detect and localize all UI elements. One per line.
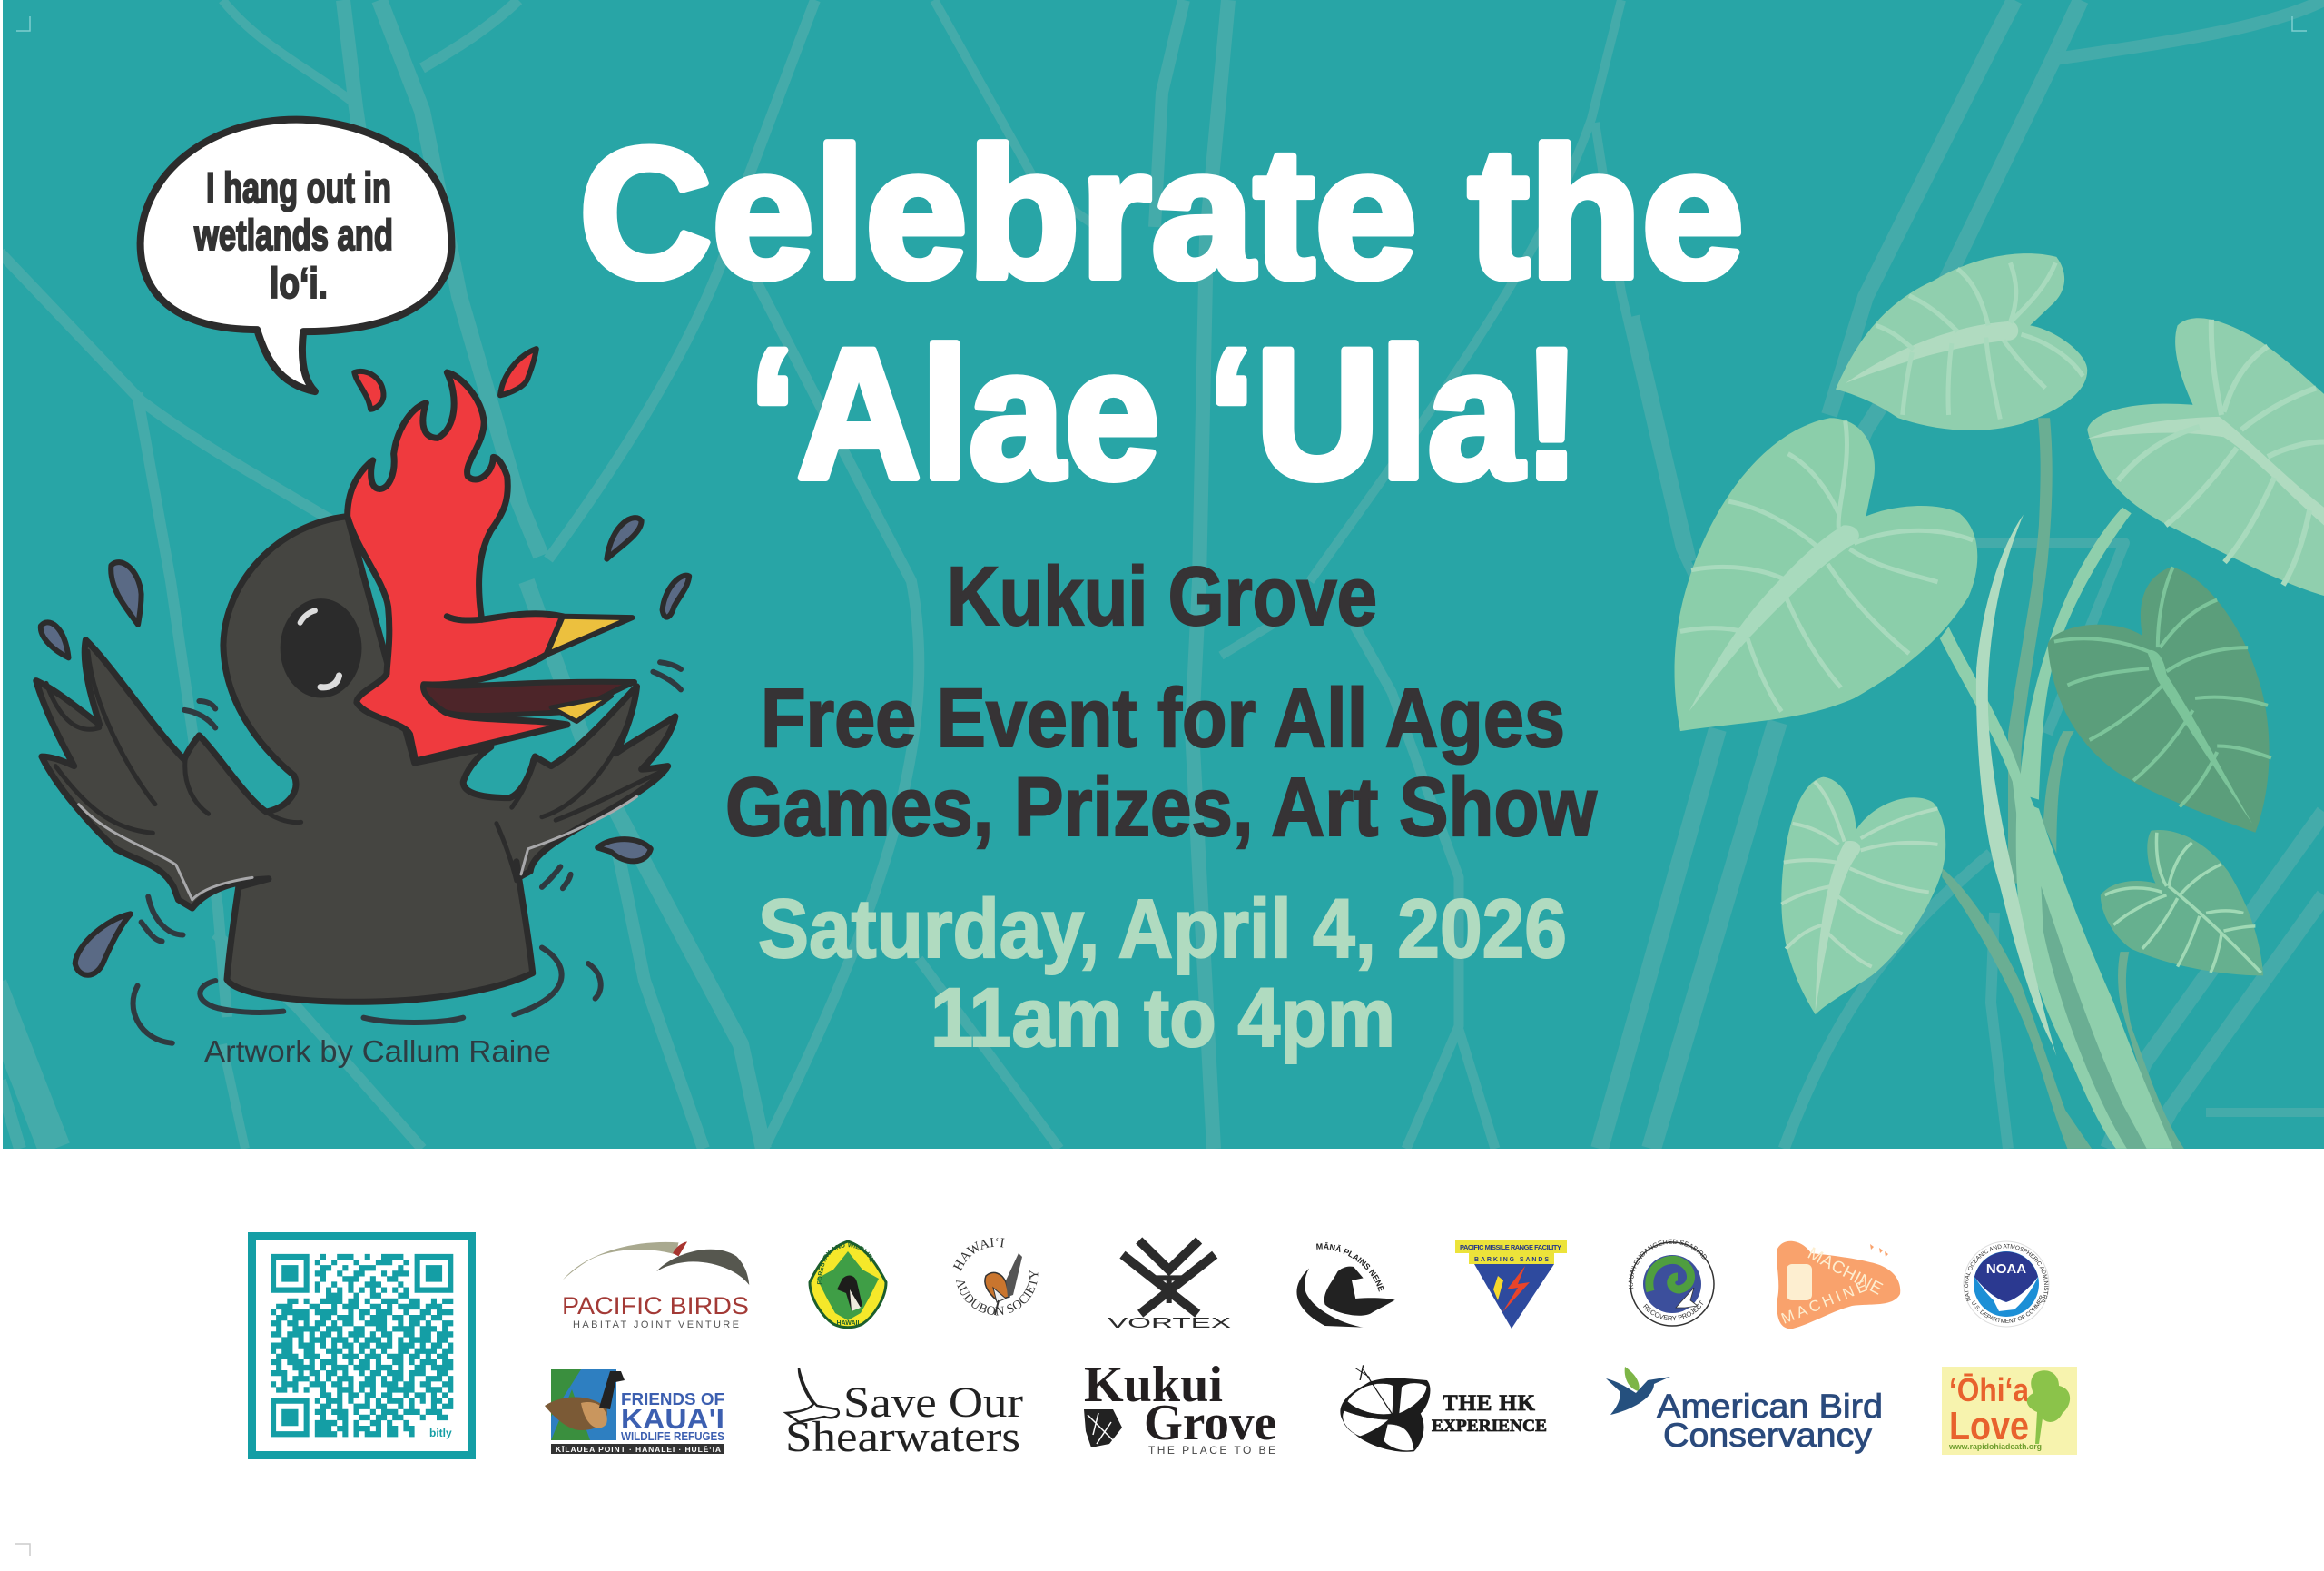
logo: NOAA: NATIONAL OCEANIC AND ATMOSPHERIC ADMINISTRATION — [1965, 1244, 2048, 1302]
logo: American Bird Conservancy: American Bird — [1657, 1388, 1883, 1425]
logo: Kukui Grove: Grove — [1144, 1395, 1276, 1451]
dark green leaf — [2048, 567, 2271, 833]
logo: Forestry and Wildlife Hawaii: FORESTRY AND WILDLIFE — [817, 1242, 874, 1284]
logo: Hawaii Audubon Society — [953, 1237, 1039, 1315]
logo: Machine Machine: MACHINE — [1778, 1278, 1869, 1328]
logo: Forestry and Wildlife Hawaii — [808, 1240, 888, 1329]
QR code: bitly — [429, 1427, 452, 1439]
background plant stems — [0, 0, 2324, 1149]
logo: Pacific Missile Range Facility: BARKING SANDS — [1474, 1257, 1549, 1263]
date and time — [758, 883, 1567, 1064]
logo: Forestry and Wildlife Hawaii: HAWAII — [837, 1320, 859, 1327]
eye — [281, 598, 361, 698]
title: Celebrate the — [579, 110, 1744, 317]
logo: Pacific Birds: PACIFIC BIRDS — [562, 1292, 749, 1319]
logo: Friends of Kauai Wildlife Refuges — [545, 1369, 724, 1454]
title: ‘Alae ‘Ula! — [749, 311, 1581, 518]
logo: Ohia Love — [1942, 1367, 2077, 1455]
event details: Games, Prizes, Art Show — [725, 761, 1597, 854]
logo: Kauai Endangered Seabird Recovery Project: RECOVERY PROJECT — [1643, 1300, 1703, 1320]
logo: Machine Machine — [1777, 1241, 1900, 1329]
logo: Kauai Endangered Seabird Recovery Project — [1629, 1239, 1715, 1327]
water and feather droplets — [41, 349, 689, 975]
speech bubble: I hang out in — [206, 163, 391, 212]
logo: Mana Plains Nene Project: MĀNĀ PLAINS NENE PROJECT — [1316, 1242, 1384, 1291]
small lower-right leaf — [2101, 830, 2263, 975]
logo: Kukui Grove — [1084, 1357, 1276, 1457]
logo: Save Our Shearwaters — [785, 1368, 1023, 1461]
logo: The HK Experience: THE HK — [1443, 1391, 1536, 1416]
logo: Pacific Birds — [562, 1241, 749, 1330]
wing feather lines — [46, 651, 667, 881]
logo: Friends of Kauai Wildlife Refuges: FRIENDS OF — [621, 1390, 724, 1408]
event details — [725, 672, 1597, 854]
logo: American Bird Conservancy — [1606, 1367, 1883, 1454]
logo: Ohia Love: www.rapidohiadeath.org — [1948, 1442, 2042, 1452]
splash ripples — [133, 662, 681, 1043]
left large leaf — [1675, 418, 1977, 731]
logo: Ohia Love: ‘Ōhi‘a — [1949, 1371, 2030, 1408]
logo: Hawaii Audubon Society: HAWAI‘I — [953, 1237, 1005, 1271]
logo: Vortex — [1108, 1240, 1232, 1331]
logo: Kukui Grove: Kukui — [1084, 1357, 1223, 1413]
logo: Vortex: VORTEX — [1108, 1316, 1232, 1331]
logo: Machine Machine: MACHINE — [1805, 1244, 1886, 1299]
speech bubble: wetlands and — [193, 211, 393, 259]
logo: Pacific Missile Range Facility — [1455, 1240, 1567, 1329]
artwork credit: Artwork by Callum Raine — [204, 1034, 551, 1068]
lower beak tip — [551, 696, 611, 721]
event details: Free Event for All Ages — [761, 672, 1565, 765]
beak upper edge stroke — [447, 617, 482, 620]
logo: Hawaii Audubon Society: AUDUBON SOCIETY — [955, 1270, 1039, 1315]
teal background panel — [3, 0, 2324, 1149]
logo: Pacific Birds: HABITAT JOINT VENTURE — [573, 1319, 739, 1330]
date and time: Saturday, April 4, 2026 — [758, 883, 1567, 975]
date and time: 11am to 4pm — [931, 972, 1395, 1064]
logo: NOAA: U.S. DEPARTMENT OF COMMERCE — [1972, 1295, 2044, 1323]
illustration: taro leaves — [1675, 253, 2324, 1149]
logo: The HK Experience: EXPERIENCE — [1432, 1417, 1547, 1436]
logo: The HK Experience — [1340, 1365, 1547, 1452]
logo: Kukui Grove: THE PLACE TO BE — [1148, 1444, 1275, 1457]
logo: American Bird Conservancy: Conservancy — [1663, 1417, 1873, 1454]
QR code — [252, 1237, 472, 1455]
right top leaf — [2087, 318, 2324, 596]
speech bubble — [141, 120, 451, 391]
logo: Friends of Kauai Wildlife Refuges: KĪLAUEA POINT · HANALEI · HULĒ‘IA — [556, 1445, 721, 1454]
illustration: splashing alae ula bird — [36, 349, 689, 1043]
leaf stems — [1940, 418, 2184, 1149]
logo: Friends of Kauai Wildlife Refuges: WILDLIFE REFUGES — [621, 1429, 724, 1443]
red flame shield — [348, 372, 567, 761]
logo: Friends of Kauai Wildlife Refuges: KAUA'I — [621, 1403, 724, 1435]
logo: Ohia Love: Love — [1949, 1404, 2029, 1448]
open mouth — [423, 682, 635, 716]
logo: Kauai Endangered Seabird Recovery Project: KAUA‘I ENDANGERED SEABIRD — [1629, 1239, 1707, 1289]
title — [579, 110, 1744, 518]
upper beak tip — [547, 617, 632, 655]
logo: Mana Plains Nene Project — [1296, 1242, 1395, 1328]
wing silver edges — [79, 796, 637, 900]
logo: Save Our Shearwaters: Save Our — [843, 1378, 1023, 1427]
top leaf — [1836, 253, 2087, 430]
speech bubble: lo‘i. — [270, 259, 328, 307]
logo: NOAA — [1963, 1240, 2050, 1328]
venue: Kukui Grove — [947, 550, 1377, 643]
logo: Pacific Missile Range Facility: PACIFIC MISSILE RANGE FACILITY — [1460, 1243, 1561, 1251]
logo: Save Our Shearwaters: Shearwaters — [785, 1413, 1020, 1461]
bird body and wings — [36, 517, 675, 1002]
small lower-left leaf — [1781, 777, 1945, 1014]
logo: NOAA: NOAA — [1986, 1261, 2026, 1277]
